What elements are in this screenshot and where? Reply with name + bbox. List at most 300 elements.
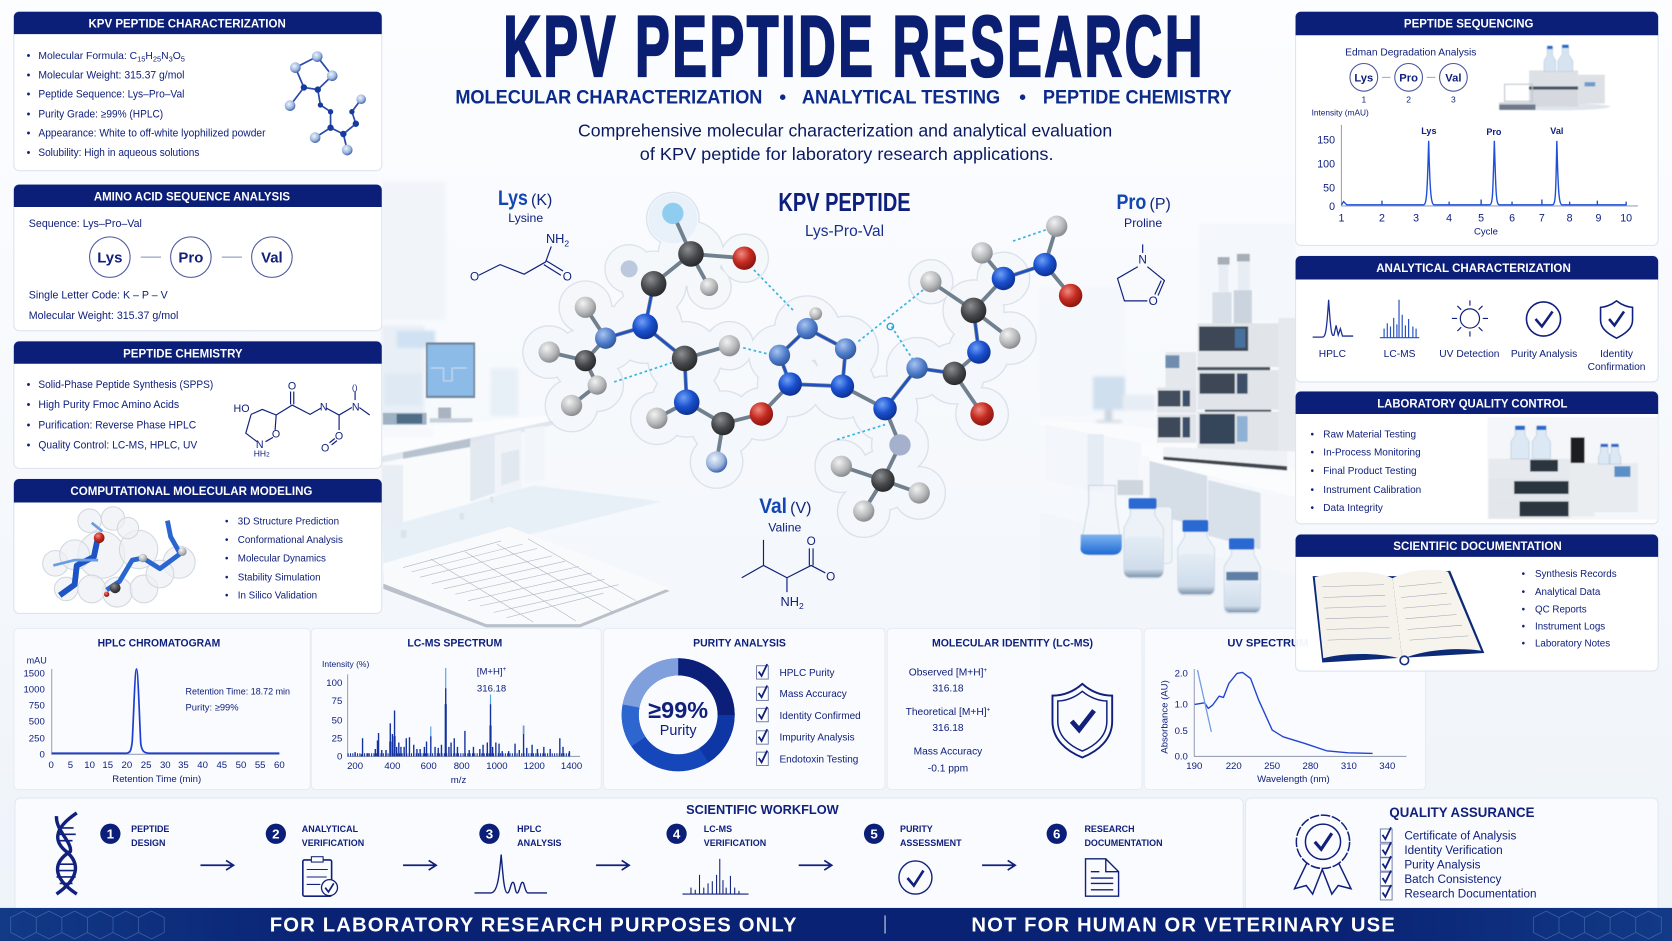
Edman chromatogram: 10 — [1620, 212, 1632, 224]
step 1: PEPTIDE — [131, 824, 169, 834]
donut chart: Purity — [660, 723, 697, 739]
chemical structure: O — [335, 431, 343, 443]
LC-MS chart: m/z — [451, 775, 466, 786]
HPLC chart: 0 — [39, 749, 45, 760]
Edman chromatogram: Lys — [1421, 126, 1437, 136]
Edman sequence: Lys — [1354, 73, 1373, 85]
HPLC chart: 30 — [160, 760, 171, 771]
atoms — [538, 203, 1082, 522]
heading: PEPTIDE CHEMISTRY — [123, 346, 243, 360]
label: lysine with structure — [470, 186, 572, 284]
chemical structure: O — [321, 442, 329, 454]
HPLC chart: 10 — [84, 760, 95, 771]
modeling list: • — [225, 554, 229, 565]
chemistry list: Solid-Phase Peptide Synthesis (SPPS) — [38, 379, 213, 391]
translucent molecular surface — [524, 193, 1035, 537]
Edman chromatogram: Intensity (mAU) — [1312, 108, 1369, 118]
mass data: + — [983, 667, 987, 674]
chemical structure: HH2 — [254, 449, 270, 459]
property list: Molecular Formula: C — [38, 51, 137, 62]
HPLC chart — [23, 656, 285, 785]
label: valine with structure: O — [807, 535, 816, 548]
panel: peptide chemistry — [14, 341, 382, 468]
purity checklist: Identity Confirmed — [779, 711, 861, 722]
LC-MS chart: 316.18 — [477, 683, 506, 694]
property list: 25 — [153, 54, 161, 63]
icon: DNA helix — [56, 813, 77, 894]
glass columns — [1219, 259, 1228, 302]
LC-MS chart: 25 — [332, 733, 342, 744]
Edman sequence — [1345, 47, 1476, 104]
QC list: Raw Material Testing — [1323, 429, 1416, 440]
sequence circles: Lys — [97, 249, 122, 266]
property list: Solubility: High in aqueous solutions — [38, 147, 199, 159]
sequence details: Molecular Weight: 315.37 g/mol — [29, 310, 178, 322]
panel: scientific workflow — [15, 798, 1243, 915]
purity checklist — [757, 664, 861, 765]
HPLC chart: 55 — [255, 760, 266, 771]
description: Comprehensive molecular characterization and analytical evaluation — [578, 121, 1112, 141]
panel: molecular identity — [887, 628, 1142, 790]
subtitle: MOLECULAR CHARACTERIZATION — [455, 87, 762, 108]
QC list — [1311, 429, 1421, 514]
chemical structure: HO — [234, 403, 250, 415]
LC-MS chart: 50 — [332, 715, 342, 726]
chemical structure: O — [288, 380, 296, 392]
mass data: Theoretical [M+H] — [906, 707, 987, 718]
mass data: 316.18 — [932, 683, 964, 694]
UV chart: 340 — [1379, 761, 1395, 772]
property list: • — [27, 89, 31, 101]
property list: O — [173, 51, 181, 62]
panel: amino acid sequence analysis — [14, 185, 382, 331]
right bench — [1040, 419, 1297, 487]
3D ribbon model — [43, 507, 195, 607]
heading: HPLC CHROMATOGRAM — [98, 638, 220, 650]
LC-MS chart: 1000 — [486, 761, 508, 772]
HPLC chart: 5 — [68, 760, 73, 771]
bonds — [549, 213, 1071, 511]
Edman chromatogram: Val — [1550, 126, 1563, 136]
step 3: HPLC — [517, 824, 542, 834]
purity checklist: HPLC Purity — [779, 668, 835, 679]
icon: UV detection: UV Detection — [1439, 349, 1500, 360]
panel: analytical characterization — [1296, 256, 1658, 382]
label: proline with structure: N — [1138, 254, 1147, 267]
arrow — [596, 860, 629, 870]
heading: LABORATORY QUALITY CONTROL — [1377, 397, 1568, 411]
step 2 — [266, 824, 364, 896]
sequence line: Sequence: Lys–Pro–Val — [29, 218, 142, 230]
label: lysine with structure: (K) — [531, 192, 552, 209]
label: valine with structure: 2 — [799, 601, 804, 611]
property list: N — [161, 51, 169, 62]
clipboard paper — [383, 527, 670, 627]
LC-MS chart: 1200 — [524, 761, 545, 772]
mass data: Observed [M+H] — [909, 667, 983, 678]
far left equipment — [382, 181, 1296, 416]
step 5: 5 — [870, 827, 878, 842]
Edman sequence: 2 — [1406, 94, 1411, 104]
subtitle: • — [779, 87, 786, 108]
LC-MS chart: 400 — [384, 761, 400, 772]
property list: 15 — [137, 54, 145, 63]
instrument stacks — [1279, 318, 1296, 451]
property list: 5 — [181, 54, 185, 63]
label: valine with structure: Val — [759, 494, 787, 518]
HPLC chart: 1500 — [23, 668, 45, 679]
Edman sequence: Val — [1445, 73, 1461, 85]
property list: Appearance: White to off-white lyophilized powder — [38, 128, 266, 140]
chemical structure: O — [272, 428, 280, 440]
step 2: 2 — [272, 827, 280, 842]
sequence details: Single Letter Code: K – P – V — [29, 290, 169, 302]
HPLC chart: 25 — [141, 760, 151, 771]
icon: LC-MS — [1380, 300, 1419, 360]
panel: peptide sequencing — [1296, 12, 1658, 245]
subtitle — [455, 87, 1232, 108]
UV chart: 280 — [1303, 761, 1319, 772]
chemical structure: N — [256, 439, 264, 451]
heading: COMPUTATIONAL MOLECULAR MODELING — [70, 484, 312, 498]
icon: LC-MS: LC-MS — [1384, 349, 1416, 360]
label: proline with structure: Proline — [1124, 216, 1162, 230]
modeling list: Conformational Analysis — [238, 535, 343, 546]
label: proline with structure: Pro — [1116, 190, 1146, 214]
HPLC chart: 60 — [274, 760, 285, 771]
LC-MS chart: [M+H] — [477, 666, 503, 677]
label: KPV peptide — [778, 189, 911, 240]
heading: LC-MS SPECTRUM — [407, 638, 502, 650]
Edman chromatogram: 5 — [1478, 212, 1484, 224]
step 3 — [475, 824, 562, 893]
icon: purity analysis: Purity Analysis — [1511, 349, 1577, 360]
donut chart: ≥99% — [648, 697, 708, 723]
UV chart: 190 — [1186, 761, 1202, 772]
label: KPV peptide: KPV PEPTIDE — [778, 189, 911, 217]
description: of KPV peptide for laboratory research applications. — [640, 144, 1054, 164]
icon: UV detection — [1439, 301, 1500, 360]
chemistry list: Quality Control: LC-MS, HPLC, UV — [38, 440, 198, 452]
QA checklist: Certificate of Analysis — [1404, 830, 1516, 843]
Edman chromatogram: 0 — [1329, 201, 1335, 213]
heading: PURITY ANALYSIS — [693, 638, 786, 650]
property list: 3 — [169, 54, 173, 63]
mass data: 316.18 — [932, 723, 964, 734]
sequence circles: Val — [261, 249, 283, 266]
panel: UV spectrum — [1144, 628, 1426, 790]
LC-MS chart — [322, 659, 582, 786]
arrow — [200, 860, 234, 870]
label: lysine with structure: Lysine — [508, 211, 543, 225]
subtitle: ANALYTICAL TESTING — [802, 87, 1000, 108]
QC list: In-Process Monitoring — [1323, 448, 1421, 459]
heading: SCIENTIFIC WORKFLOW — [686, 802, 840, 817]
HPLC chart: 0 — [49, 760, 54, 771]
step 4: 4 — [673, 827, 681, 842]
modeling list: In Silico Validation — [238, 591, 317, 602]
Edman chromatogram: 3 — [1413, 212, 1419, 224]
step 6: RESEARCH — [1084, 824, 1135, 834]
arrow — [403, 860, 436, 870]
hydrogen bonds — [614, 228, 1050, 440]
documentation list: Synthesis Records — [1535, 569, 1617, 580]
UV chart — [1160, 668, 1406, 785]
HPLC chart: 15 — [102, 760, 113, 771]
LC-MS chart: 1400 — [561, 761, 582, 772]
step 5: PURITY — [900, 824, 933, 834]
purity checklist: Endotoxin Testing — [779, 754, 858, 765]
icon: HPLC: HPLC — [1319, 349, 1346, 360]
HPLC chart: 40 — [197, 760, 208, 771]
label: lysine with structure: Lys — [498, 186, 528, 210]
property list: Purity Grade: ≥99% (HPLC) — [38, 108, 163, 120]
label: proline with structure: (P) — [1150, 196, 1171, 213]
modeling list: • — [225, 572, 229, 583]
icon: identity confirmation — [1588, 301, 1646, 373]
modeling list: Stability Simulation — [238, 572, 321, 583]
QA checklist — [1380, 827, 1537, 900]
property list — [27, 50, 266, 159]
Edman chromatogram: 8 — [1567, 212, 1573, 224]
subtitle: PEPTIDE CHEMISTRY — [1043, 87, 1232, 108]
step 1 — [100, 824, 169, 848]
label: valine with structure: NH — [781, 594, 799, 609]
chart annotation — [186, 687, 290, 713]
HPLC chart: 50 — [236, 760, 246, 771]
step 3: 3 — [486, 827, 493, 842]
documentation list: Instrument Logs — [1535, 621, 1605, 632]
HPLC chart: 250 — [29, 733, 45, 744]
image: QC instruments — [1488, 417, 1658, 520]
mass data: Mass Accuracy — [914, 746, 983, 757]
UV chart: 250 — [1264, 761, 1280, 772]
step 6 — [1047, 824, 1163, 896]
purity checklist: Mass Accuracy — [779, 689, 847, 700]
Edman chromatogram: Cycle — [1474, 227, 1498, 238]
LC-MS chart: 100 — [326, 678, 342, 689]
label: lysine with structure: 2 — [564, 238, 569, 248]
documentation list — [1522, 569, 1617, 650]
heading: ANALYTICAL CHARACTERIZATION — [1376, 261, 1571, 275]
UV chart: 310 — [1341, 761, 1357, 772]
label: proline with structure — [1116, 190, 1171, 308]
label: lysine with structure: O — [470, 271, 479, 284]
HPLC chart: Retention Time (min) — [112, 774, 201, 785]
step 1: 1 — [107, 827, 115, 842]
sequence circles: Pro — [178, 249, 203, 266]
icon: HPLC — [1313, 300, 1353, 360]
QC list: • — [1311, 466, 1315, 477]
step 2: VERIFICATION — [302, 838, 364, 848]
Edman chromatogram: 4 — [1446, 212, 1452, 224]
QC list: • — [1311, 485, 1315, 496]
icon: purity analysis — [1511, 302, 1577, 360]
chemical structure: N — [320, 402, 328, 414]
documentation list: • — [1522, 639, 1526, 650]
Edman chromatogram: Pro — [1486, 127, 1502, 137]
property list: H — [145, 51, 153, 62]
image: open lab notebook — [1313, 570, 1484, 665]
documentation list: • — [1522, 621, 1526, 632]
documentation list: QC Reports — [1535, 604, 1587, 615]
chemistry list: • — [27, 419, 31, 431]
chemistry list: • — [27, 399, 31, 411]
UV chart: 0.0 — [1175, 752, 1188, 763]
step 6: DOCUMENTATION — [1084, 838, 1163, 848]
step 6: 6 — [1053, 827, 1060, 842]
chart annotation: Purity: ≥99% — [186, 703, 239, 713]
chemical structure — [234, 380, 370, 459]
QC list: Final Product Testing — [1323, 466, 1417, 477]
LC-MS chart: 800 — [454, 761, 470, 772]
LC-MS chart: 200 — [347, 761, 363, 772]
LC-MS chart: 0 — [337, 752, 342, 763]
arrow — [982, 860, 1015, 870]
QC list: • — [1311, 429, 1315, 440]
Edman chromatogram: 100 — [1317, 158, 1335, 171]
chemistry list — [27, 379, 213, 452]
disclaimer right: NOT FOR HUMAN OR VETERINARY USE — [971, 914, 1395, 936]
QA checklist: Research Documentation — [1404, 887, 1537, 900]
disclaimer left: FOR LABORATORY RESEARCH PURPOSES ONLY — [270, 914, 797, 936]
chemistry list: High Purity Fmoc Amino Acids — [38, 399, 179, 411]
panel: KPV peptide characterization — [14, 12, 382, 171]
Edman sequence: Edman Degradation Analysis — [1345, 47, 1476, 58]
step 5 — [864, 824, 962, 894]
Edman chromatogram: 9 — [1595, 212, 1601, 224]
panel: HPLC chromatogram — [14, 628, 310, 790]
step 4 — [666, 824, 766, 894]
flask and bottles — [1081, 485, 1260, 613]
right lab scene — [1093, 377, 1155, 422]
HPLC chart: 500 — [29, 716, 45, 727]
label: lysine with structure: NH — [546, 231, 564, 246]
label: valine with structure: (V) — [790, 500, 811, 517]
QA checklist: Purity Analysis — [1404, 858, 1481, 871]
panel: purity analysis — [604, 628, 885, 790]
documentation list: Laboratory Notes — [1535, 639, 1610, 650]
heading: UV SPECTRUM — [1227, 638, 1308, 650]
QC list: • — [1311, 503, 1315, 514]
mass data: + — [987, 707, 991, 714]
UV chart: 220 — [1226, 761, 1242, 772]
label: lysine with structure: O — [563, 271, 572, 284]
modeling list: Molecular Dynamics — [238, 554, 326, 565]
modeling list: • — [225, 535, 229, 546]
image: sequencer instrument — [1499, 45, 1610, 110]
donut chart — [630, 667, 726, 763]
QA checklist: Batch Consistency — [1404, 873, 1502, 886]
chemistry list: • — [27, 379, 31, 391]
sequence details — [29, 290, 178, 322]
Edman chromatogram: 150 — [1317, 134, 1335, 146]
QA checklist: Identity Verification — [1404, 844, 1503, 857]
HPLC chart: mAU — [27, 656, 47, 666]
Edman sequence: 3 — [1451, 94, 1456, 104]
UV chart: Wavelength (nm) — [1257, 774, 1330, 785]
modeling list: 3D Structure Prediction — [238, 516, 339, 527]
footer banner — [0, 908, 1672, 941]
arrow — [799, 860, 832, 870]
panel: LC-MS spectrum — [311, 628, 601, 790]
step 4: LC-MS — [704, 824, 732, 834]
Edman chromatogram — [1312, 108, 1638, 238]
documentation list: • — [1522, 604, 1526, 615]
LC-MS chart: 75 — [332, 696, 342, 707]
step 2: ANALYTICAL — [302, 824, 359, 834]
step 1: DESIGN — [131, 838, 165, 848]
label: proline with structure: O — [1149, 295, 1158, 308]
HPLC chart: 750 — [29, 700, 45, 711]
icon: rosette badge — [1295, 815, 1351, 894]
property list: • — [27, 69, 31, 81]
icon: shield check — [1052, 684, 1112, 757]
property list: Peptide Sequence: Lys–Pro–Val — [38, 89, 184, 101]
Edman chromatogram: 1 — [1338, 212, 1344, 224]
chemical structure: N — [352, 402, 360, 414]
step 3: ANALYSIS — [517, 838, 562, 848]
heading: PEPTIDE SEQUENCING — [1404, 17, 1533, 31]
Edman chromatogram: 2 — [1379, 212, 1385, 224]
label: valine with structure: O — [826, 570, 835, 583]
purity checklist: Impurity Analysis — [779, 732, 855, 743]
property list: • — [27, 128, 31, 140]
label: valine with structure: Valine — [768, 520, 802, 534]
heading: QUALITY ASSURANCE — [1389, 804, 1534, 820]
LC-MS chart: + — [503, 666, 507, 673]
property list: • — [27, 108, 31, 120]
heading: MOLECULAR IDENTITY (LC-MS) — [932, 638, 1093, 650]
Edman chromatogram: 50 — [1323, 183, 1335, 195]
chart annotation: Retention Time: 18.72 min — [186, 687, 290, 697]
UV chart: 0.5 — [1175, 726, 1188, 737]
step 4: VERIFICATION — [704, 838, 766, 848]
modeling list: • — [225, 591, 229, 602]
heading: AMINO ACID SEQUENCE ANALYSIS — [94, 190, 290, 204]
property list: • — [27, 147, 31, 159]
step 5: ASSESSMENT — [900, 838, 962, 848]
subtitle: • — [1019, 87, 1026, 108]
label: valine with structure — [742, 494, 835, 611]
HPLC chart: 20 — [122, 760, 132, 771]
QC list: • — [1311, 448, 1315, 459]
icon: ball and stick molecule — [285, 51, 366, 155]
chemistry list: • — [27, 440, 31, 452]
panel: scientific documentation — [1296, 535, 1658, 671]
mass data: -0.1 ppm — [928, 763, 968, 774]
UV chart: 2.0 — [1175, 668, 1188, 679]
modeling list: • — [225, 516, 229, 527]
mass data — [906, 667, 991, 774]
Edman sequence: Pro — [1399, 73, 1418, 85]
heading: KPV PEPTIDE CHARACTERIZATION — [89, 17, 286, 31]
label: KPV peptide: Lys-Pro-Val — [805, 223, 884, 240]
3D KPV peptide molecule — [524, 193, 1082, 537]
HPLC chart: 1000 — [23, 684, 45, 695]
QC list: Instrument Calibration — [1323, 485, 1421, 496]
documentation list: • — [1522, 569, 1526, 580]
Edman chromatogram: 7 — [1539, 212, 1545, 224]
description — [578, 121, 1112, 164]
Edman chromatogram: 6 — [1509, 212, 1515, 224]
documentation list: Analytical Data — [1535, 587, 1601, 598]
panel: laboratory quality control — [1296, 392, 1658, 524]
sequence circles — [90, 237, 292, 277]
HPLC chart: 35 — [178, 760, 189, 771]
chemistry list: Purification: Reverse Phase HPLC — [38, 419, 196, 431]
panel: computational molecular modeling — [14, 479, 382, 613]
